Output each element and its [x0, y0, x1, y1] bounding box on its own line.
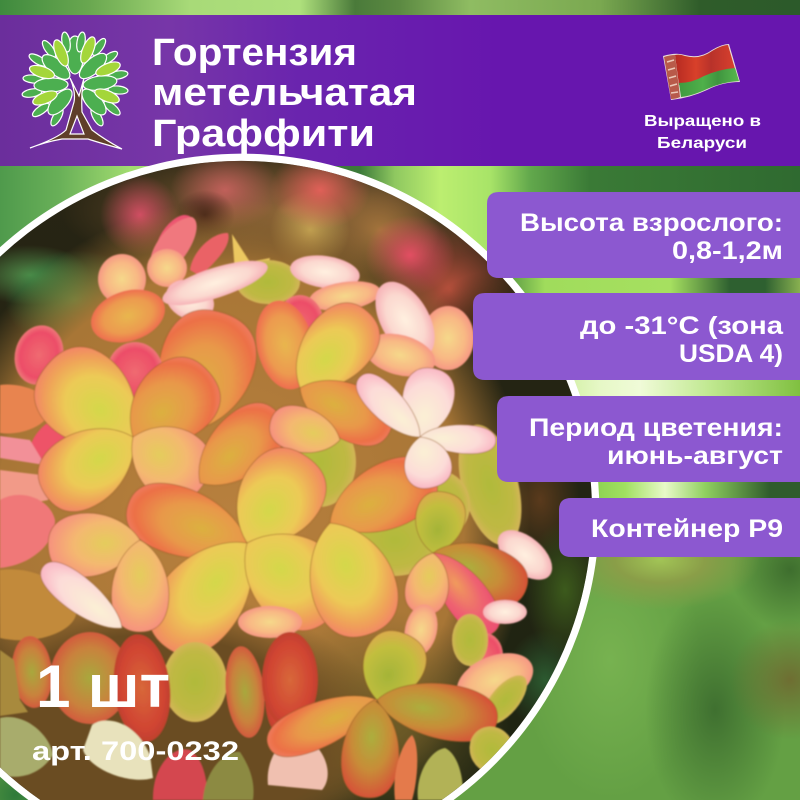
flower: lower left: [0, 508, 169, 642]
photo circle: hydrangea: [0, 154, 600, 800]
logo: tree: [21, 31, 129, 149]
roots and trunk: [30, 78, 122, 149]
flower: centre right: [309, 456, 438, 638]
title: [152, 32, 417, 155]
panel: flowering period: июнь-август: [607, 442, 783, 470]
flower: central: [151, 446, 328, 653]
panel: frost hardiness: USDA 4): [679, 340, 783, 368]
pale flower: [348, 363, 497, 493]
panel: container: [559, 498, 800, 557]
panel: height: [487, 192, 800, 278]
panel: frost hardiness: [473, 293, 800, 380]
article number: арт. 700-0232: [32, 736, 239, 766]
panel: height: Высота взрослого:: [520, 209, 783, 237]
petals behind the central flowers: [126, 424, 554, 581]
title: Гортензия: [152, 32, 357, 74]
flower: right: [404, 490, 529, 668]
left edge petals: [0, 324, 65, 569]
orange petal centre: [198, 402, 281, 486]
origin label: Выращено в: [644, 113, 761, 130]
title: метельчатая: [152, 72, 417, 114]
back mass: [84, 208, 474, 384]
flower: lower right: [260, 622, 541, 800]
origin label: [644, 113, 761, 152]
flower: upper left: [33, 308, 257, 512]
panel: flowering period: [497, 396, 800, 482]
quantity label: 1 шт: [36, 653, 170, 720]
panel: flowering period: Период цветения:: [529, 414, 783, 442]
header band: [0, 15, 800, 166]
origin label: Беларуси: [657, 135, 747, 152]
icon: flag of Belarus: [663, 44, 740, 100]
flower: upper centre: [255, 300, 392, 454]
panel: height: 0,8-1,2м: [672, 237, 783, 265]
panel: frost hardiness: до -31°C (зона: [580, 312, 784, 340]
title: Граффити: [152, 113, 375, 155]
lower petals: [0, 631, 328, 800]
panel: container: Контейнер Р9: [591, 515, 783, 543]
